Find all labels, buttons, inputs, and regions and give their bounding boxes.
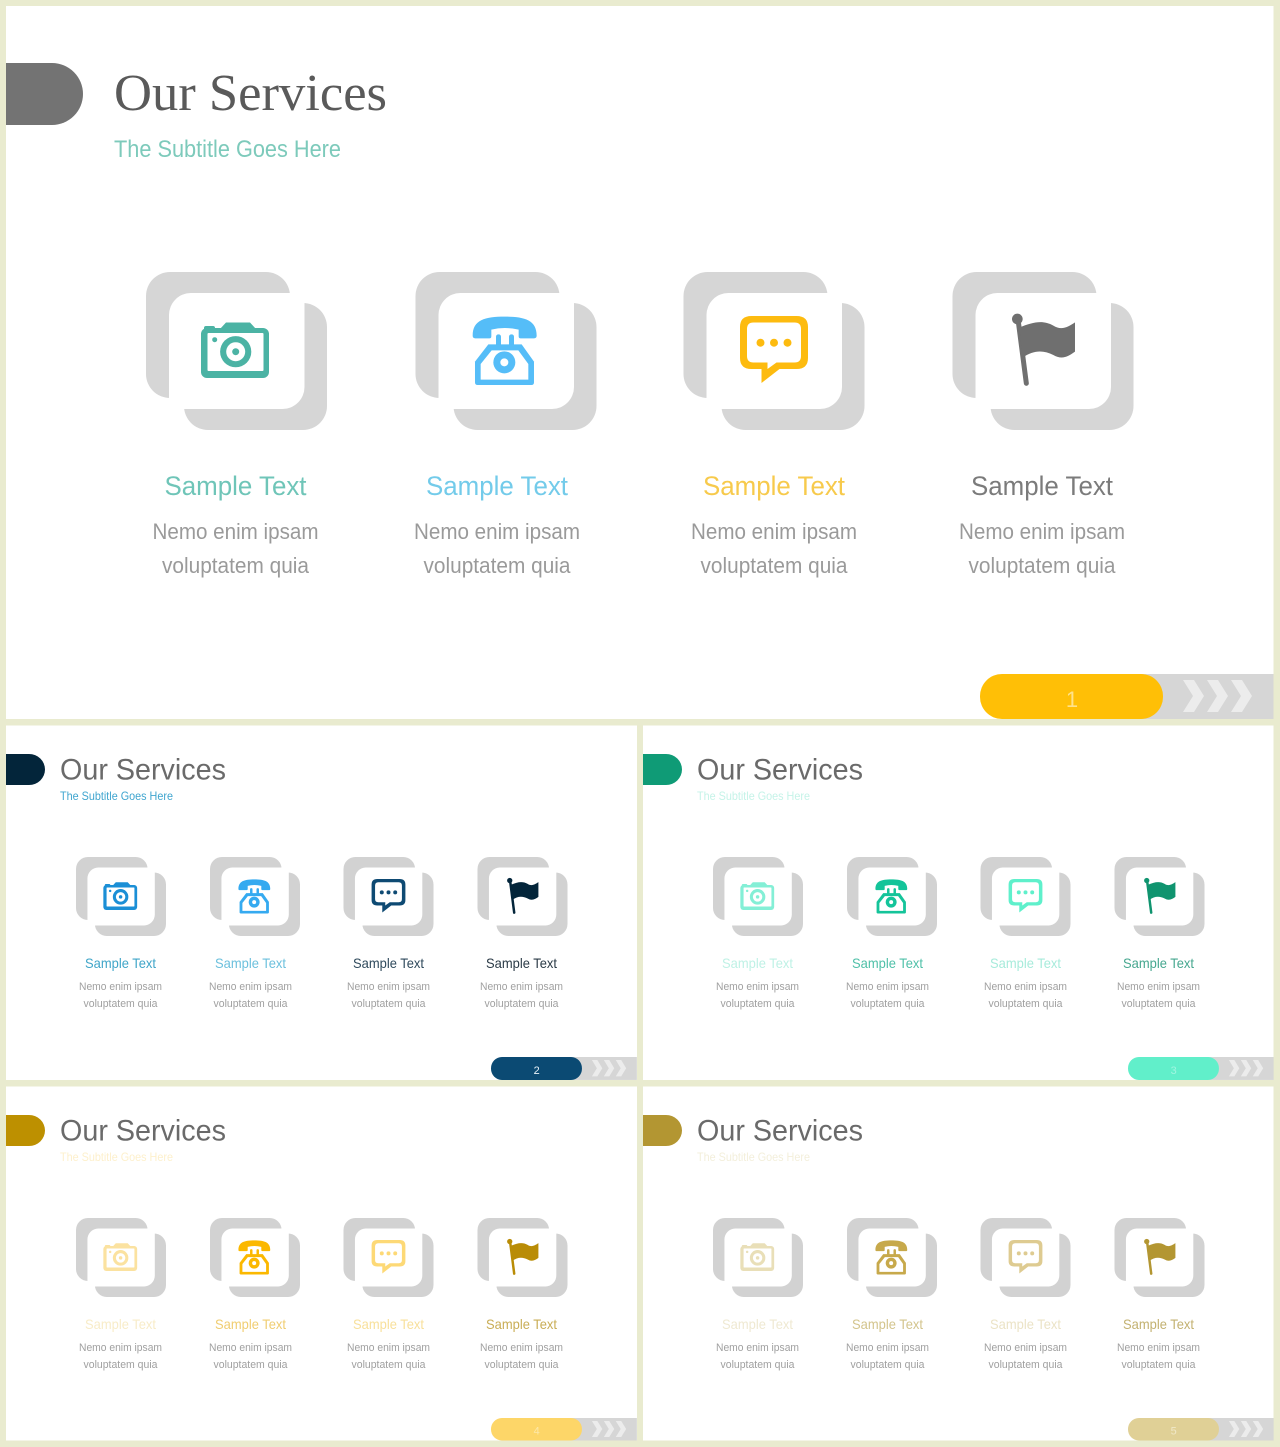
text: column 4: voluptatem quia <box>968 553 1116 578</box>
tile: flag <box>1114 857 1204 936</box>
text: column 1: voluptatem quia <box>162 553 310 578</box>
subtitle: The Subtitle Goes Here <box>697 1150 810 1164</box>
text: column 1: voluptatem quia <box>84 998 158 1010</box>
subtitle: The Subtitle Goes Here <box>60 789 173 803</box>
subtitle: The Subtitle Goes Here <box>60 1150 173 1164</box>
text: column 3: Nemo enim ipsam <box>347 1342 430 1354</box>
text: column 2: voluptatem quia <box>424 553 571 578</box>
text: column 2: Sample Text <box>852 955 923 971</box>
text: column 3: voluptatem quia <box>988 998 1063 1010</box>
icon: camera <box>103 882 137 910</box>
text: column 2: Nemo enim ipsam <box>209 981 292 993</box>
footer: page number pill and chevrons <box>980 674 1274 719</box>
header tab <box>6 754 45 785</box>
icon: flag <box>1144 1239 1175 1274</box>
text: column 2 <box>846 955 929 1010</box>
text: column 1: Nemo enim ipsam <box>716 1342 799 1354</box>
icon: chat bubble <box>372 879 405 912</box>
icon: phone <box>238 1240 270 1274</box>
panel: main slide 1 <box>6 6 1274 719</box>
header tab <box>6 63 83 125</box>
text: column 2 <box>209 955 292 1010</box>
text: column 1: Nemo enim ipsam <box>79 981 162 993</box>
tile: chat <box>684 272 864 430</box>
subtitle: The Subtitle Goes Here <box>114 136 341 163</box>
text: column 3: Nemo enim ipsam <box>347 981 430 993</box>
tile: phone <box>416 272 596 430</box>
text: column 1: Nemo enim ipsam <box>152 519 318 544</box>
text: column 2: voluptatem quia <box>850 1359 925 1371</box>
text: column 3 <box>984 955 1067 1010</box>
footer: page number pill and chevrons: 2 <box>534 1065 540 1077</box>
text: column 2: Sample Text <box>215 1316 286 1332</box>
tile: phone <box>210 1218 300 1297</box>
text: column 2: voluptatem quia <box>850 998 925 1010</box>
footer: page number pill and chevrons: 1 <box>1066 687 1078 712</box>
footer: page number pill and chevrons: 4 <box>534 1425 540 1438</box>
text: column 2 <box>846 1316 929 1371</box>
text: column 1 <box>152 471 318 578</box>
icon: flag <box>507 1239 538 1274</box>
footer: page number pill and chevrons <box>1128 1057 1274 1080</box>
text: column 3: Sample Text <box>990 1316 1061 1332</box>
text: column 1: Sample Text <box>164 471 307 501</box>
panel: slide 3 <box>643 726 1274 1080</box>
tile: phone <box>847 857 937 936</box>
footer: page number pill and chevrons: 3 <box>1171 1065 1177 1077</box>
text: column 4: Nemo enim ipsam <box>480 981 563 993</box>
text: column 3: voluptatem quia <box>700 553 848 578</box>
text: column 2: Nemo enim ipsam <box>846 981 929 993</box>
icon: phone <box>875 879 907 913</box>
text: column 1 <box>716 955 799 1010</box>
icon: flag <box>1144 878 1175 913</box>
text: column 1: Sample Text <box>722 955 793 971</box>
icon: chat bubble <box>372 1240 405 1274</box>
icon: camera <box>103 1243 137 1271</box>
text: column 1: voluptatem quia <box>84 1359 158 1371</box>
tile: chat <box>344 1218 433 1297</box>
text: column 3: voluptatem quia <box>352 1359 426 1371</box>
text: column 4 <box>959 471 1125 578</box>
text: column 4: Nemo enim ipsam <box>1117 981 1200 993</box>
text: column 1 <box>79 955 162 1010</box>
icon: chat bubble <box>1009 1240 1042 1274</box>
text: column 4 <box>480 1316 563 1371</box>
text: column 2: Nemo enim ipsam <box>846 1342 929 1354</box>
text: column 3 <box>347 1316 430 1371</box>
text: column 2: Sample Text <box>215 955 286 971</box>
text: column 1: Sample Text <box>85 1316 156 1332</box>
footer: page number pill and chevrons <box>491 1057 637 1080</box>
text: column 3: Sample Text <box>990 955 1061 971</box>
title: Our Services <box>697 754 863 786</box>
text: column 3: voluptatem quia <box>352 998 426 1010</box>
icon: chat bubble <box>1009 879 1042 912</box>
text: column 1: Nemo enim ipsam <box>79 1342 162 1354</box>
tile: flag <box>952 272 1134 430</box>
text: column 1: voluptatem quia <box>720 998 795 1010</box>
tile: chat <box>344 857 433 936</box>
text: column 2: Nemo enim ipsam <box>209 1342 292 1354</box>
text: column 1: Nemo enim ipsam <box>716 981 799 993</box>
tile: flag <box>1114 1218 1204 1297</box>
icon: chat bubble <box>740 316 808 383</box>
text: column 3 <box>984 1316 1067 1371</box>
text: column 4: Sample Text <box>486 1316 557 1332</box>
icon: phone <box>473 317 537 385</box>
footer: page number pill and chevrons: 5 <box>1171 1425 1177 1438</box>
text: column 4: voluptatem quia <box>484 1359 559 1371</box>
text: column 4 <box>1117 955 1200 1010</box>
header tab <box>643 754 682 785</box>
tile: chat <box>980 1218 1070 1297</box>
tile: camera <box>713 1218 803 1297</box>
tile: phone <box>210 857 300 936</box>
icon: flag <box>507 878 538 913</box>
text: column 1 <box>716 1316 799 1371</box>
text: column 3: Sample Text <box>353 955 424 971</box>
text: column 3: Nemo enim ipsam <box>691 519 857 544</box>
text: column 3: Sample Text <box>703 471 845 501</box>
icon: camera <box>201 322 269 378</box>
panel: slide 5 <box>643 1086 1274 1440</box>
text: column 4: Sample Text <box>971 471 1113 501</box>
text: column 4: Sample Text <box>1123 1316 1194 1332</box>
text: column 3 <box>691 471 857 578</box>
text: column 3: Sample Text <box>353 1316 424 1332</box>
text: column 2: voluptatem quia <box>214 998 288 1010</box>
tile: flag <box>478 857 567 936</box>
tile: camera <box>146 272 327 430</box>
text: column 4: Nemo enim ipsam <box>959 519 1125 544</box>
text: column 3: Nemo enim ipsam <box>984 981 1067 993</box>
text: column 4: Nemo enim ipsam <box>1117 1342 1200 1354</box>
text: column 4: Sample Text <box>486 955 557 971</box>
text: column 2: Sample Text <box>426 471 568 501</box>
footer: page number pill and chevrons <box>1128 1418 1274 1440</box>
text: column 4: Sample Text <box>1123 955 1194 971</box>
footer: page number pill and chevrons <box>491 1418 637 1440</box>
panel: slide 2 <box>6 726 637 1080</box>
text: column 1: Sample Text <box>85 955 156 971</box>
icon: camera <box>740 1243 774 1271</box>
title: Our Services <box>697 1114 863 1148</box>
text: column 2 <box>414 471 580 578</box>
text: column 2 <box>209 1316 292 1371</box>
subtitle: The Subtitle Goes Here <box>697 789 810 803</box>
text: column 2: voluptatem quia <box>214 1359 288 1371</box>
text: column 4 <box>1117 1316 1200 1371</box>
text: column 2: Sample Text <box>852 1316 923 1332</box>
title: Our Services <box>60 1114 226 1148</box>
tile: phone <box>847 1218 937 1297</box>
header tab <box>643 1115 682 1146</box>
text: column 1: Sample Text <box>722 1316 793 1332</box>
tile: camera <box>713 857 803 936</box>
icon: phone <box>875 1240 907 1274</box>
text: column 3 <box>347 955 430 1010</box>
icon: flag <box>1012 314 1075 383</box>
text: column 4 <box>480 955 563 1010</box>
text: column 4: Nemo enim ipsam <box>480 1342 563 1354</box>
text: column 4: voluptatem quia <box>1122 1359 1196 1371</box>
text: column 1 <box>79 1316 162 1371</box>
icon: phone <box>238 879 270 913</box>
text: column 3: voluptatem quia <box>988 1359 1063 1371</box>
title: Our Services <box>114 65 387 122</box>
tile: camera <box>76 857 166 936</box>
tile: camera <box>76 1218 166 1297</box>
text: column 3: Nemo enim ipsam <box>984 1342 1067 1354</box>
panel: slide 4 <box>6 1086 637 1440</box>
header tab <box>6 1115 45 1146</box>
text: column 2: Nemo enim ipsam <box>414 519 580 544</box>
icon: camera <box>740 882 774 910</box>
tile: flag <box>478 1218 567 1297</box>
title: Our Services <box>60 754 226 786</box>
text: column 1: voluptatem quia <box>720 1359 795 1371</box>
tile: chat <box>980 857 1070 936</box>
text: column 4: voluptatem quia <box>484 998 559 1010</box>
text: column 4: voluptatem quia <box>1122 998 1196 1010</box>
